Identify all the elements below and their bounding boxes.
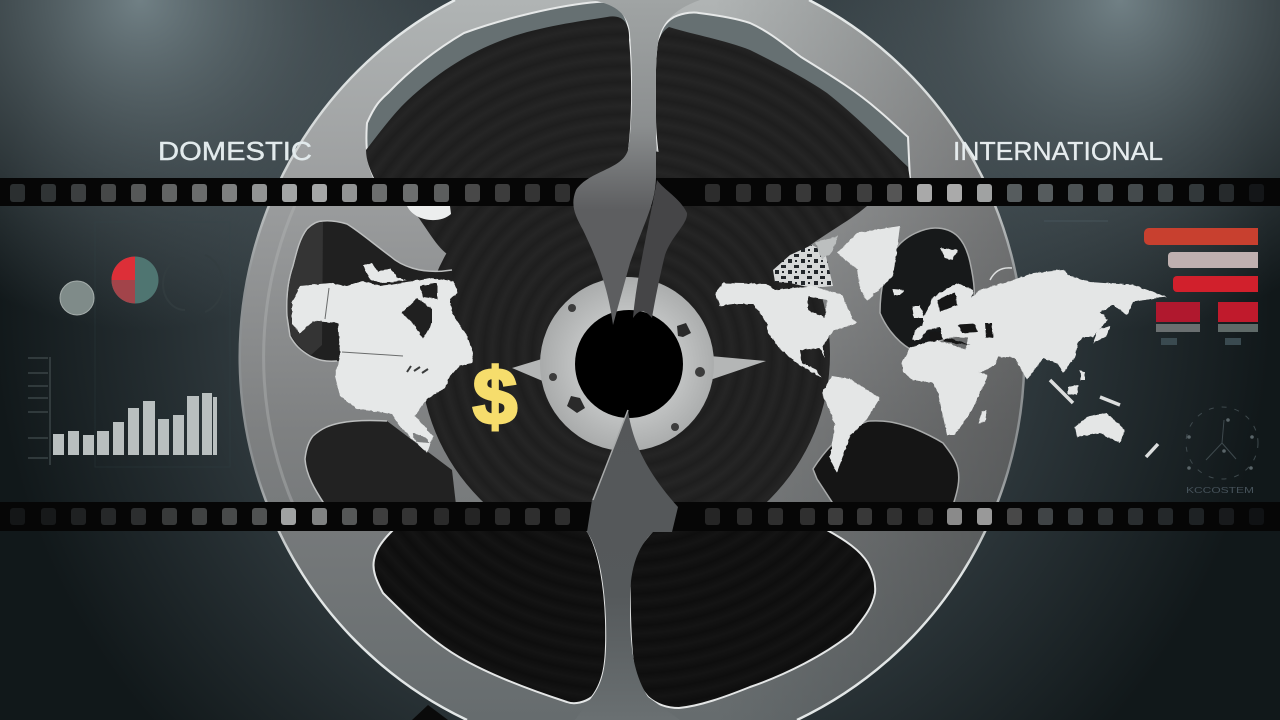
radar caption: KCCOSTEM	[1186, 486, 1254, 495]
inland seas	[928, 292, 993, 345]
faint dial	[163, 255, 223, 312]
map: north america	[292, 263, 473, 453]
reel spokes: centre top	[573, 0, 700, 325]
heading: domestic: DOMESTIC	[158, 136, 312, 166]
bottom window right	[630, 530, 875, 708]
film reel	[240, 0, 1024, 720]
top window right	[656, 12, 910, 180]
reel hub	[512, 277, 766, 451]
tape core	[420, 149, 830, 559]
icon: small grey circle	[60, 281, 94, 315]
pie chart	[112, 256, 158, 304]
right lower window	[813, 421, 959, 505]
bar chart	[28, 357, 217, 465]
film strip: bottom	[0, 502, 1280, 531]
tape below top film strip: left	[380, 178, 620, 400]
reel spokes: centre bottom	[575, 410, 680, 720]
radar diagram	[1186, 407, 1258, 479]
icon: dollar sign: $	[473, 352, 517, 441]
top window left	[366, 2, 631, 180]
land masses	[715, 226, 1167, 473]
arctic speckle	[773, 245, 833, 288]
bottom window left	[373, 530, 606, 703]
film strip: top	[0, 178, 1280, 206]
map islands as strokes	[1050, 380, 1158, 457]
panel: domestic charts	[28, 222, 230, 467]
left upper window	[287, 221, 460, 361]
right upper window	[880, 228, 974, 349]
reel base shadow	[412, 705, 448, 720]
heading: international: INTERNATIONAL	[953, 136, 1163, 166]
panel: international charts	[1044, 221, 1258, 495]
tape below top film strip: right	[650, 178, 905, 330]
red and grey horizontal bars	[1144, 228, 1258, 345]
map: world	[715, 226, 1167, 473]
left lower window	[305, 420, 456, 505]
map fragment near film strip	[407, 206, 451, 220]
